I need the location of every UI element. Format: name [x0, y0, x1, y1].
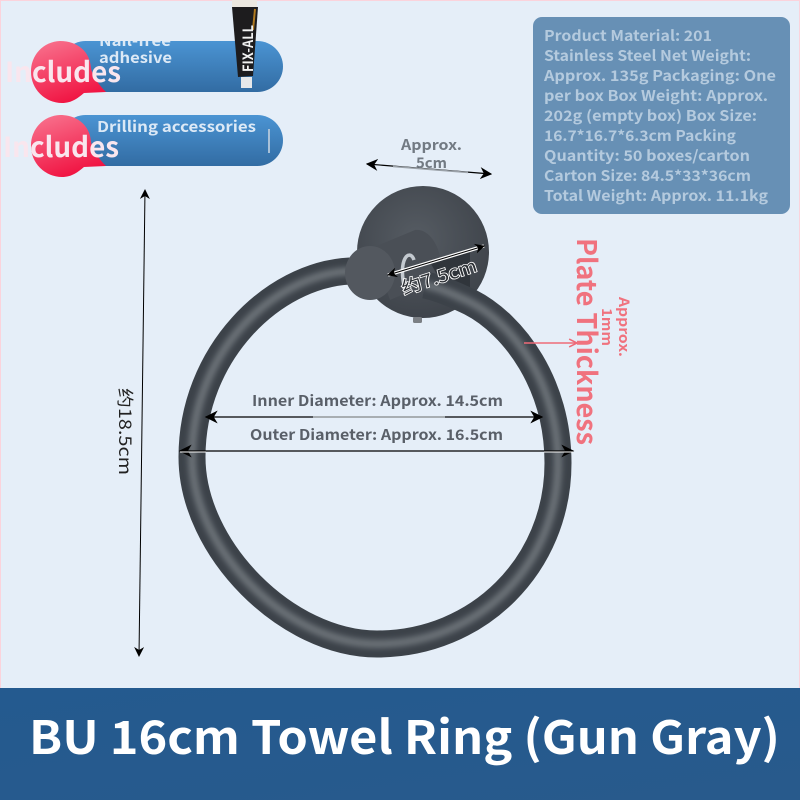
specs text: Quantity: 50 boxes/carton: [544, 145, 750, 166]
dimension: approx 5cm: [367, 134, 491, 174]
specs text: Total Weight: Approx. 11.1kg: [544, 185, 768, 206]
wall plate: [357, 186, 489, 318]
towel ring product: [192, 186, 558, 644]
icon: glue tube: FIX-ALL: [238, 25, 258, 72]
ring sheen: [192, 271, 558, 644]
label: 约18.5cm: [114, 388, 139, 475]
end cap: [345, 246, 395, 300]
includes label: Includes: [3, 126, 119, 166]
approx label: Approx.: [614, 296, 634, 357]
adhesive label: adhesive: [99, 47, 172, 68]
includes label: Includes: [5, 51, 121, 91]
plate thickness label: Plate Thickness: [569, 238, 608, 445]
red includes blob: [31, 41, 106, 103]
dark gap under post: [430, 250, 470, 300]
specs text: per box Box Weight: Approx.: [544, 85, 768, 106]
label 5cm: 5cm: [416, 152, 447, 173]
nail-free label: Nail-free: [99, 30, 171, 51]
drilling label: Drilling accessories: [97, 116, 256, 137]
specs text: Carton Size: 84.5*33*36cm: [544, 165, 751, 186]
label: Outer Diameter: Approx. 16.5cm: [250, 424, 503, 445]
title band: [0, 688, 800, 800]
mounting screw: [413, 317, 422, 323]
specs text: [543, 25, 776, 206]
badge: drilling accessories: [3, 115, 283, 177]
arrow: [524, 342, 577, 344]
panel: product specs: [533, 17, 790, 214]
1mm label: 1mm: [597, 308, 617, 346]
icon: glue tube: [232, 0, 258, 88]
specs text: 16.7*16.7*6.3cm Packing: [544, 125, 736, 146]
specs text: 202g (empty box) Box Size:: [544, 105, 757, 126]
label: 约7.5cm: [398, 252, 480, 301]
ring: [192, 271, 558, 644]
title: BU 16cm Towel Ring (Gun Gray): [29, 702, 780, 768]
red includes blob: [31, 115, 106, 177]
specs text: Approx. 135g Packaging: One: [543, 65, 776, 86]
label: Inner Diameter: Approx. 14.5cm: [252, 390, 503, 411]
pill background: [60, 41, 283, 92]
dimension: 7.5cm: [388, 246, 484, 301]
label approx: Approx.: [400, 134, 462, 155]
dimension: height 18.5cm: [114, 190, 145, 656]
post: [372, 230, 441, 300]
pill background: [60, 115, 283, 166]
callout: plate thickness: [524, 238, 634, 445]
icon: screw: [268, 129, 270, 153]
hook: [402, 255, 414, 290]
badge: nail-free adhesive: [5, 0, 283, 103]
specs text: Product Material: 201: [544, 25, 712, 46]
specs text: Stainless Steel Net Weight:: [544, 45, 751, 66]
